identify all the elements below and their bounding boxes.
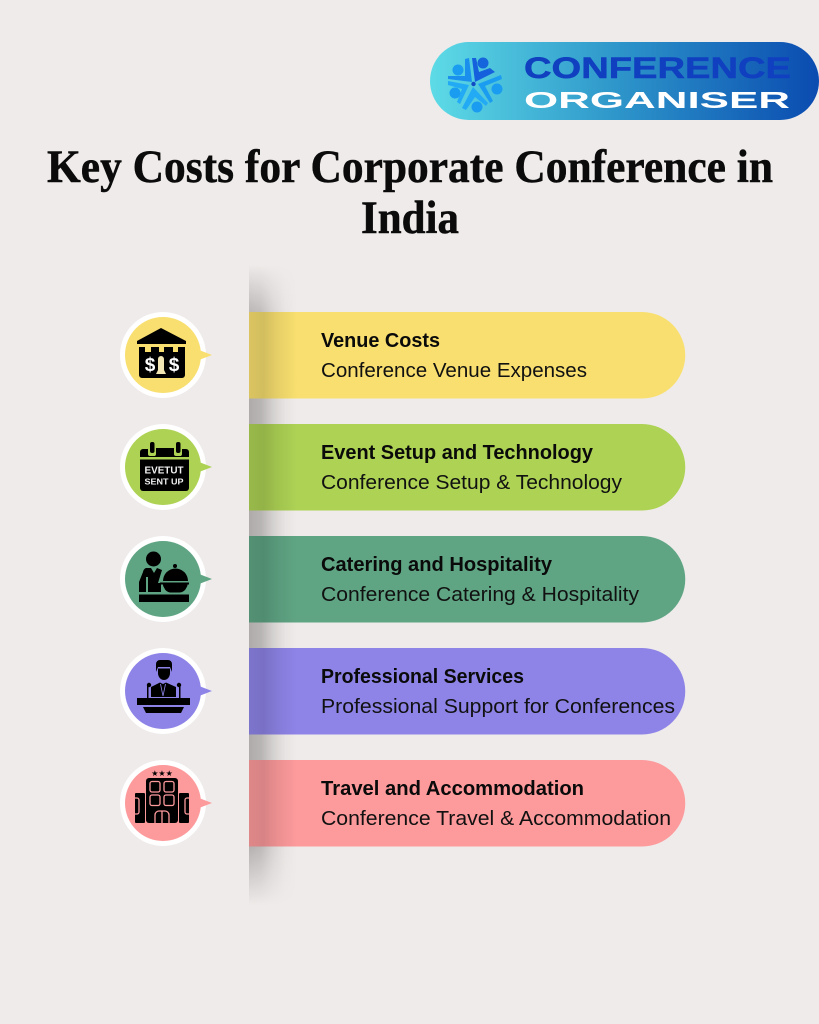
logo wordmark: organiser: ORGANISER <box>524 87 791 113</box>
bar: venue <box>249 312 685 398</box>
bar shading <box>249 312 297 846</box>
heading: event setup: Event Setup and Technology <box>321 442 594 464</box>
title <box>47 141 773 244</box>
heading: catering: Catering and Hospitality <box>321 554 553 576</box>
icon: professional speaker badge <box>120 648 212 734</box>
icon: event setup badge <box>120 424 212 510</box>
bar: event setup <box>249 424 685 510</box>
title: Key Costs for Corporate Conference in <box>47 141 773 193</box>
heading: travel: Travel and Accommodation <box>321 778 584 800</box>
text: travel: Conference Travel & Accommodation <box>321 808 671 830</box>
bar: professional <box>249 648 685 734</box>
bar: catering <box>249 536 685 622</box>
icon: event setup badge: SENT UP <box>144 476 184 486</box>
text: venue: Conference Venue Expenses <box>321 360 587 382</box>
panel: professional services <box>249 648 685 734</box>
icon: catering badge <box>120 536 212 622</box>
logo pill <box>430 42 819 120</box>
panel: travel <box>249 760 685 846</box>
title: India <box>361 192 459 244</box>
icon: venue badge <box>120 312 212 398</box>
icon: venue badge: $ <box>169 355 180 376</box>
icon: hotel badge: ★★★ <box>151 769 173 778</box>
vertical shadow line <box>249 272 284 897</box>
icon: event setup badge: EVETUT <box>144 464 184 476</box>
logo wordmark: conference: CONFERENCE <box>524 52 791 85</box>
text: professional: Professional Support for Conferences <box>321 696 675 718</box>
bar: travel <box>249 760 685 846</box>
icon: venue badge: $ <box>145 355 156 376</box>
text: catering: Conference Catering & Hospitality <box>321 584 639 606</box>
text: event setup: Conference Setup & Technology <box>321 472 622 494</box>
heading: professional: Professional Services <box>321 666 524 688</box>
panel: catering <box>249 536 685 622</box>
panel: venue costs <box>249 312 685 398</box>
icon: hotel badge <box>120 760 212 846</box>
heading: venue: Venue Costs <box>321 330 440 352</box>
logo badge <box>430 42 819 120</box>
icon: people circle logo mark <box>448 58 502 112</box>
panel: event setup <box>249 424 685 510</box>
